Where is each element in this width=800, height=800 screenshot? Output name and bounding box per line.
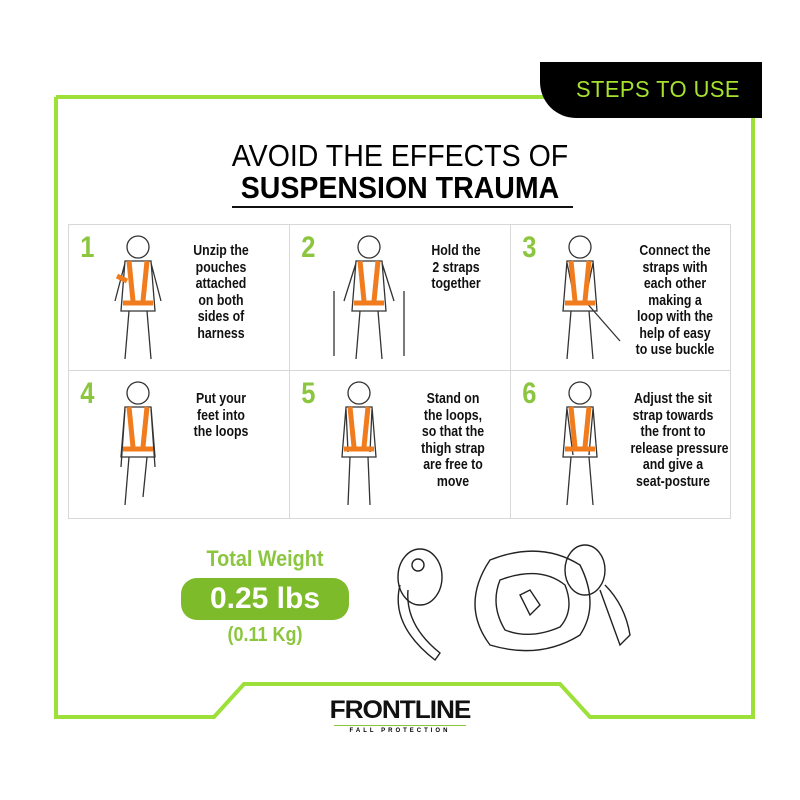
- step 5: [289, 370, 511, 519]
- product illustration: [397, 544, 631, 661]
- steps grid: [68, 224, 731, 519]
- step 2: [289, 224, 511, 371]
- step 2: 2: [301, 231, 315, 264]
- step 5: the loops,: [424, 408, 482, 424]
- step 1: pouches: [196, 260, 246, 276]
- logo: FALL PROTECTION: [350, 728, 450, 734]
- step 2: together: [431, 276, 481, 292]
- title: AVOID THE EFFECTS OF: [232, 138, 568, 173]
- step 6: 6: [522, 377, 536, 410]
- step 3: help of easy: [639, 326, 711, 342]
- step 1: sides of: [198, 309, 244, 325]
- step 3: each other: [644, 276, 706, 292]
- step 4: the loops: [194, 424, 248, 440]
- step 4: 4: [80, 377, 94, 410]
- total weight block: (0.11 Kg): [227, 624, 303, 646]
- step 1: Unzip the: [193, 243, 249, 259]
- step 1: [68, 224, 290, 371]
- step 6: Adjust the sit: [634, 391, 712, 407]
- step 5: 5: [301, 377, 315, 410]
- step 6: and give a: [643, 457, 703, 473]
- step 1: 1: [80, 231, 94, 264]
- step 5: thigh strap: [421, 440, 485, 456]
- total weight block: [181, 546, 349, 646]
- logo: FRONTLINE: [330, 696, 470, 724]
- step 5: are free to: [423, 457, 483, 473]
- step 1: harness: [197, 326, 245, 342]
- step 2: Hold the: [431, 243, 481, 259]
- step 3: Connect the: [639, 243, 711, 259]
- step 6: [510, 370, 731, 519]
- step 6: strap towards: [633, 408, 713, 424]
- step 4: feet into: [197, 408, 245, 424]
- title: [232, 138, 568, 205]
- step 5: so that the: [422, 424, 484, 440]
- step 6: the front to: [640, 424, 706, 440]
- step 3: straps with: [642, 260, 708, 276]
- total weight block: 0.25 lbs: [210, 582, 320, 615]
- step 5: Stand on: [427, 391, 479, 407]
- step 4: Put your: [196, 391, 246, 407]
- step 6: release pressure: [630, 440, 728, 456]
- title: SUSPENSION TRAUMA: [241, 170, 559, 205]
- step 1: on both: [198, 292, 244, 308]
- step 3: making a: [648, 292, 702, 308]
- tab: steps to use: [540, 62, 762, 118]
- total weight block: Total Weight: [207, 546, 323, 571]
- tab: steps to use: STEPS TO USE: [576, 76, 740, 102]
- step 6: seat-posture: [636, 474, 710, 490]
- step 5: move: [437, 474, 469, 490]
- step 2: 2 straps: [432, 260, 480, 276]
- step 3: to use buckle: [636, 342, 714, 358]
- step 3: loop with the: [637, 309, 713, 325]
- step 4: [68, 370, 290, 519]
- step 1: attached: [196, 276, 246, 292]
- step 3: [510, 224, 731, 371]
- step 3: 3: [522, 231, 536, 264]
